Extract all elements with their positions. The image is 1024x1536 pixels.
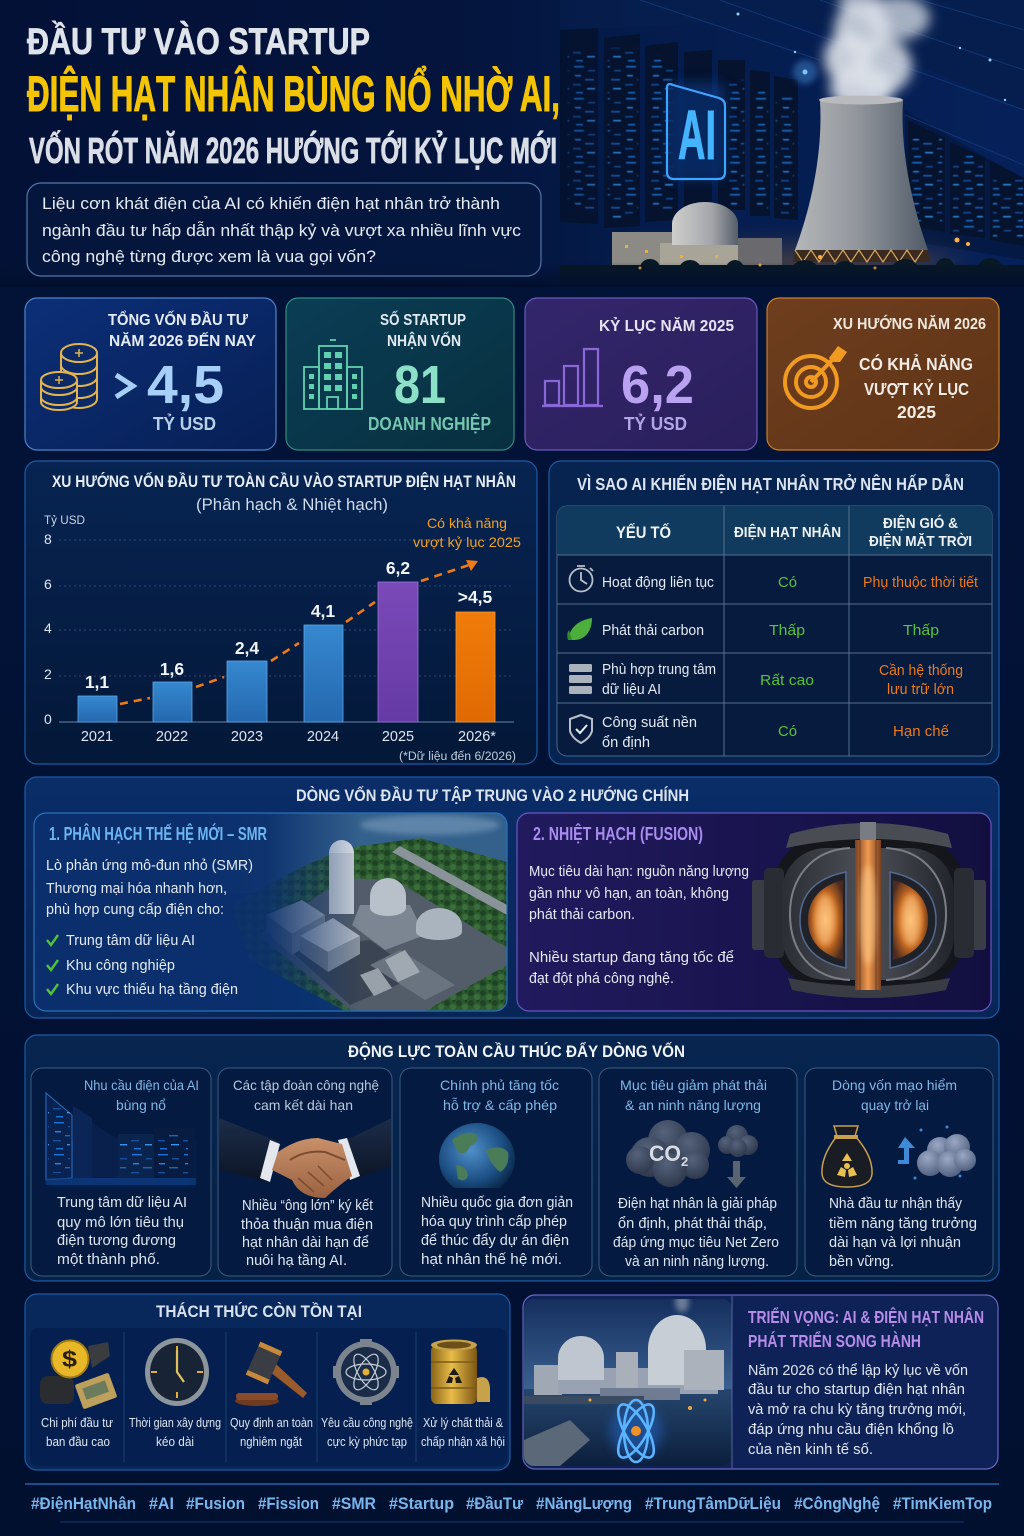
comparison table: ổn định [602, 735, 650, 751]
icon: gear with atom [333, 1339, 399, 1405]
AI sign: AI [678, 96, 716, 174]
card: venture capital: tiềm năng tăng trưởng [829, 1216, 977, 1232]
image: SMR plant aerial [242, 814, 506, 1010]
icon: clock [570, 566, 593, 592]
challenge labels: Yêu cầu công nghệ [321, 1416, 413, 1430]
card: fusion: đạt đột phá công nghệ. [529, 970, 674, 987]
card: fusion: Mục tiêu dài hạn: nguồn năng lượng [529, 863, 749, 880]
value labels: 2,4 [235, 638, 259, 658]
icon: bar growth [542, 349, 603, 406]
bar chart [78, 582, 495, 722]
icon: CO2 cloud and down arrow: 2 [681, 1154, 688, 1169]
card: tech corporations: Các tập đoàn công nghệ [233, 1077, 379, 1093]
panel: KPI startups funded: 81 [394, 355, 446, 415]
panel: global funding trend chart: 6 [44, 576, 52, 592]
image: data center buildings [46, 1093, 196, 1185]
comparison table: Thấp [769, 622, 805, 639]
panel: KPI startups funded: DOANH NGHIỆP [368, 413, 491, 434]
card: emission goals: ổn định, phát thải thấp, [618, 1216, 767, 1232]
year labels: 2024 [307, 729, 339, 745]
year labels [81, 729, 496, 745]
panel: global funding trend chart: (*Dữ liệu đến 6/2026) [399, 751, 516, 763]
hashtags: #TimKiemTop [893, 1494, 992, 1513]
panel: KPI total capital [25, 298, 276, 450]
card: governments [400, 1068, 592, 1276]
hashtags [31, 1494, 992, 1513]
panel: KPI total capital: 4,5 [147, 355, 224, 415]
card: tech corporations: Nhiều “ông lớn” ký kết [242, 1198, 373, 1214]
challenge labels: kéo dài [156, 1435, 194, 1449]
trend arrow [120, 560, 478, 704]
comparison table: Có [778, 723, 797, 740]
panel: KPI startups funded: NHẬN VỐN [387, 332, 461, 350]
card: emission goals: Mục tiêu giảm phát thải [620, 1077, 767, 1093]
panel: two main investment directions [25, 777, 999, 1018]
reactor buildings [612, 202, 782, 266]
icon: building [304, 340, 362, 409]
hashtags: #CôngNghệ [794, 1494, 880, 1513]
comparison table: ĐIỆN HẠT NHÂN [734, 523, 841, 541]
intro question box: công nghệ từng được xem là vua gọi vốn? [42, 247, 376, 266]
panel: global drivers: ĐỘNG LỰC TOÀN CẦU THÚC ĐẨY DÒNG VỐN [348, 1041, 685, 1061]
card: SMR fission: 1. PHÂN HẠCH THẾ HỆ MỚI – SMR [49, 823, 267, 844]
comparison table: Thấp [903, 622, 939, 639]
card: venture capital: bền vững. [829, 1254, 894, 1270]
comparison table: ĐIỆN GIÓ & [883, 514, 958, 532]
challenge labels: Chi phí đầu tư [41, 1416, 113, 1430]
comparison table [557, 506, 992, 756]
panel: global funding trend chart: 2 [44, 666, 52, 682]
hashtags: #ĐầuTư [466, 1494, 524, 1513]
challenge labels: cực kỳ phức tạp [327, 1435, 407, 1449]
checklist: Khu vực thiếu hạ tầng điện [66, 981, 238, 998]
panel: KPI startups funded [286, 298, 514, 450]
challenge labels: Quy định an toàn [230, 1416, 313, 1430]
challenge labels: Thời gian xây dựng [129, 1416, 221, 1430]
card: tech corporations [218, 1068, 392, 1276]
card: emission goals: đáp ứng mục tiêu Net Zero [613, 1235, 779, 1251]
title: ĐẦU TƯ VÀO STARTUP [27, 21, 370, 62]
value labels: >4,5 [458, 587, 493, 607]
value labels [85, 558, 493, 692]
icon: target and arrow [785, 346, 847, 408]
icon: server [569, 664, 592, 694]
panel: KPI trend 2026: 2025 [897, 402, 936, 422]
card: venture capital: Nhà đầu tư nhận thấy [829, 1196, 963, 1212]
comparison table: Hạn chế [893, 723, 950, 740]
card: venture capital: dài hạn và lợi nhuận [829, 1235, 961, 1251]
orange glow of plant [738, 233, 962, 265]
card: emission goals [599, 1068, 797, 1276]
hashtags: #Startup [389, 1494, 454, 1513]
card: tech corporations: hạt nhân dài hạn để [242, 1235, 369, 1251]
card: tech corporations: nuôi hạ tầng AI. [246, 1253, 347, 1269]
card: governments: hóa quy trình cấp phép [421, 1214, 567, 1230]
intro question box [27, 183, 541, 276]
panel: KPI trend 2026: CÓ KHẢ NĂNG [859, 353, 973, 374]
panel: global funding trend chart: (Phân hạch & Nhiệt hạch) [196, 496, 388, 514]
AI sign [667, 83, 725, 179]
card: SMR fission: phù hợp cung cấp điện cho: [46, 901, 224, 918]
challenge labels: Xử lý chất thải & [423, 1416, 504, 1430]
panel: outlook [523, 1292, 998, 1469]
checklist: Trung tâm dữ liệu AI [66, 932, 195, 949]
trees and lights [560, 258, 1024, 283]
panel: global funding trend chart: XU HƯỚNG VỐN ĐẦU TƯ TOÀN CẦU VÀO STARTUP ĐIỆN HẠT NHÂN [52, 471, 516, 491]
card: AI power demand: Trung tâm dữ liệu AI [57, 1194, 187, 1211]
comparison table: Cần hệ thống [879, 662, 963, 679]
year labels: 2022 [156, 729, 188, 745]
panel: global funding trend chart: 0 [44, 711, 52, 727]
card: fusion [517, 813, 991, 1011]
card: AI power demand: Nhu cầu điện của AI [84, 1077, 199, 1093]
comparison table: dữ liệu AI [602, 682, 661, 698]
comparison table: Rất cao [760, 672, 814, 689]
icon: clock time [145, 1338, 209, 1406]
panel: two main investment directions: DÒNG VỐN ĐẦU TƯ TẬP TRUNG VÀO 2 HƯỚNG CHÍNH [296, 785, 689, 805]
panel: global funding trend chart: Tỷ USD [44, 513, 85, 527]
card: fusion: phát thải carbon. [529, 906, 635, 923]
panel: outlook: đầu tư cho startup điện hạt nhân [748, 1382, 965, 1398]
intro question box: ngành đầu tư hấp dẫn nhất thập kỷ và vượt xa nhiều lĩnh vực [42, 221, 522, 240]
title: VỐN RÓT NĂM 2026 HƯỚNG TỚI KỶ LỤC MỚI [29, 129, 557, 171]
panel: KPI total capital: TỶ USD [153, 413, 216, 434]
card: SMR fission [34, 813, 507, 1011]
hero illustration: data center and nuclear plant [0, 0, 1024, 288]
hashtags: #SMR [332, 1494, 376, 1513]
challenge labels: nghiêm ngặt [240, 1435, 302, 1449]
image: reactor domes at night with atom [524, 1292, 732, 1466]
comparison table: lưu trữ lớn [887, 681, 954, 698]
comparison table: Hoạt động liên tục [602, 575, 714, 591]
card: fusion: gần như vô hạn, an toàn, không [529, 885, 729, 902]
card: fusion: Nhiều startup đang tăng tốc để [529, 949, 734, 966]
panel: KPI record 2025: 6,2 [621, 355, 694, 415]
panel: KPI record 2025 [525, 298, 757, 450]
card: SMR fission: Thương mại hóa nhanh hơn, [46, 880, 227, 897]
panel: global funding trend chart: vượt kỷ lục 2025 [413, 534, 521, 550]
plant buildings [266, 840, 462, 996]
panel: global funding trend chart: 4 [44, 620, 52, 636]
panel: KPI record 2025: KỶ LỤC NĂM 2025 [599, 318, 734, 335]
panel: KPI total capital: TỔNG VỐN ĐẦU TƯ [108, 311, 248, 329]
year labels: 2023 [231, 729, 263, 745]
panel: why AI makes nuclear attractive: VÌ SAO AI KHIẾN ĐIỆN HẠT NHÂN TRỞ NÊN HẤP DẪN [577, 473, 964, 494]
comparison table: ĐIỆN MẶT TRỜI [869, 532, 972, 550]
panel: remaining challenges [25, 1294, 510, 1470]
card: governments: hạt nhân thế hệ mới. [421, 1252, 562, 1268]
smoke plume [824, 0, 930, 110]
icon: leaf [567, 618, 592, 640]
comparison table: YẾU TỐ [616, 522, 671, 542]
hashtags: #Fission [258, 1494, 319, 1513]
checklist [47, 932, 238, 998]
comparison table: Phù hợp trung tâm [602, 662, 716, 678]
card: emission goals: & an ninh năng lượng [625, 1097, 761, 1113]
value labels: 1,6 [160, 659, 184, 679]
panel: outlook: đáp ứng nhu cầu điện khổng lồ [748, 1422, 954, 1438]
comparison table: Có [778, 574, 797, 591]
icon: shield check [570, 715, 592, 743]
panel: KPI total capital: NĂM 2026 ĐẾN NAY [109, 333, 257, 350]
card: fusion: 2. NHIỆT HẠCH (FUSION) [533, 823, 703, 844]
icon: CO2 cloud and down arrow: CO [649, 1141, 681, 1166]
year labels: 2021 [81, 729, 113, 745]
card: governments: Chính phủ tăng tốc [440, 1077, 559, 1093]
hashtags: #AI [149, 1494, 174, 1513]
hashtags: #TrungTâmDữLiệu [645, 1494, 781, 1513]
challenge labels: ban đầu cao [46, 1435, 110, 1449]
icon: rising arrow and clouds [898, 1126, 976, 1180]
card: venture capital [805, 1068, 993, 1276]
value labels: 1,1 [85, 672, 109, 692]
panel: KPI trend 2026: XU HƯỚNG NĂM 2026 [833, 315, 986, 333]
image: tokamak reactor [752, 822, 986, 998]
hashtags: #Fusion [186, 1494, 245, 1513]
panel: KPI record 2025: TỶ USD [624, 413, 687, 434]
icon: glowing atom [616, 1398, 656, 1464]
card: AI power demand: quy mô lớn tiêu thụ [57, 1214, 184, 1231]
card: tech corporations: cam kết dài hạn [254, 1097, 353, 1113]
intro question box: Liệu cơn khát điện của AI có khiến điện hạt nhân trở thành [42, 194, 500, 213]
comparison table: Phát thải carbon [602, 623, 704, 639]
card: AI power demand: một thành phố. [57, 1251, 160, 1268]
challenge labels: chấp nhận xã hội [421, 1435, 505, 1449]
panel: global funding trend chart: 8 [44, 531, 52, 547]
panel: outlook: và mở ra chu kỳ tăng trưởng mới, [748, 1402, 966, 1418]
title [27, 21, 560, 171]
panel: remaining challenges: THÁCH THỨC CÒN TỒN TẠI [156, 1302, 362, 1321]
card: SMR fission: Lò phản ứng mô-đun nhỏ (SMR) [46, 857, 253, 874]
panel: outlook: PHÁT TRIỂN SONG HÀNH [748, 1330, 921, 1351]
card: AI power demand [31, 1068, 211, 1276]
card: venture capital: quay trở lại [861, 1097, 929, 1113]
comparison table: Công suất nền [602, 715, 697, 731]
panel: global drivers [25, 1035, 999, 1281]
icon: coin stacks [41, 344, 97, 410]
panel: why AI makes nuclear attractive [549, 461, 999, 764]
icon: CO2 cloud and down arrow [626, 1120, 758, 1188]
comparison table: Phụ thuộc thời tiết [863, 574, 979, 591]
hashtags: #ĐiệnHạtNhân [31, 1494, 136, 1513]
panel: KPI startups funded: SỐ STARTUP [380, 311, 466, 329]
card: emission goals: và an ninh năng lượng. [625, 1254, 769, 1270]
image: handshake [219, 1118, 392, 1198]
panel: outlook: Năm 2026 có thể lập kỷ lục về vốn [748, 1363, 968, 1379]
panel: global funding trend chart [25, 461, 537, 764]
cooling tower [793, 96, 930, 262]
card: governments: hỗ trợ & cấp phép [443, 1097, 557, 1113]
icon: money bag with radiation symbol [822, 1126, 872, 1187]
value labels: 4,1 [311, 601, 335, 621]
card: governments: để thúc đẩy dự án điện [421, 1233, 569, 1249]
panel: KPI trend 2026 [767, 298, 999, 450]
panel: outlook: của nền kinh tế số. [748, 1442, 873, 1458]
card: tech corporations: thỏa thuận mua điện [241, 1217, 373, 1233]
title: ĐIỆN HẠT NHÂN BÙNG NỔ NHỜ AI, [27, 65, 560, 122]
icon: cost money: $ [62, 1346, 77, 1372]
card: AI power demand: bùng nổ [116, 1097, 166, 1113]
card: AI power demand: điện tương đương [57, 1232, 176, 1249]
year labels: 2025 [382, 729, 414, 745]
icon: globe [439, 1123, 515, 1195]
card: emission goals: Điện hạt nhân là giải pháp [618, 1196, 777, 1212]
panel: KPI trend 2026: VƯỢT KỶ LỤC [864, 378, 969, 399]
card: venture capital: Dòng vốn mạo hiểm [832, 1077, 957, 1093]
icon: cost money [40, 1340, 117, 1409]
card: governments: Nhiều quốc gia đơn giản [421, 1195, 573, 1211]
panel: global funding trend chart: Có khả năng [427, 515, 507, 531]
hashtags: #NăngLượng [536, 1494, 632, 1513]
year labels: 2026* [458, 729, 496, 745]
challenge labels [41, 1416, 505, 1449]
value labels: 6,2 [386, 558, 410, 578]
icon: waste barrel [431, 1340, 490, 1404]
checklist: Khu công nghiệp [66, 957, 175, 974]
icon: gavel [235, 1342, 307, 1406]
